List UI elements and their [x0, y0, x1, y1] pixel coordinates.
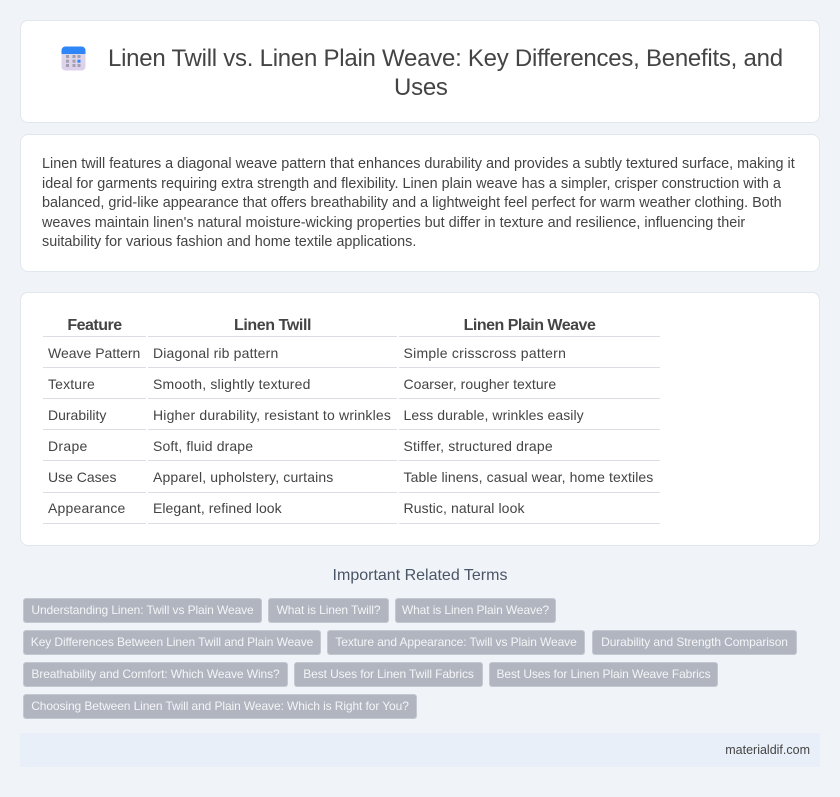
tag: What is Linen Plain Weave?: [402, 603, 549, 617]
tag: Understanding Linen: Twill vs Plain Weave: [31, 603, 254, 617]
panel: title card: [20, 20, 820, 123]
row: Drape: Soft, fluid drape: [153, 438, 253, 454]
row: Drape: [48, 438, 553, 454]
tag: Durability and Strength Comparison: [601, 635, 788, 649]
tag: [395, 598, 556, 623]
tag: [23, 598, 262, 623]
row: Texture: Coarser, rougher texture: [404, 376, 556, 392]
text block: description: suitability for various fashion and home textile applications.: [42, 234, 416, 250]
tag: What is Linen Twill?: [277, 603, 380, 617]
row: Use Cases: Apparel, upholstery, curtains: [153, 469, 333, 485]
tag: Breathability and Comfort: Which Weave Wins?: [31, 667, 280, 681]
icon: calendar grid: [62, 46, 86, 70]
row: Durability: Less durable, wrinkles easily: [404, 407, 584, 423]
tags: related terms: [23, 598, 797, 719]
tag: [23, 630, 321, 655]
tag: [294, 662, 483, 687]
row: Drape: Drape: [48, 438, 88, 454]
row: Texture: Texture: [48, 376, 95, 392]
tag: Best Uses for Linen Plain Weave Fabrics: [496, 667, 710, 681]
heading: related terms: Important Related Terms: [333, 567, 507, 584]
row: Use Cases: [48, 469, 653, 485]
title second line: Uses: [394, 74, 448, 101]
title: Linen Twill vs. Linen Plain Weave: Key Differences, Benefits, and: [108, 45, 783, 72]
row: Appearance: Elegant, refined look: [153, 500, 282, 516]
text block: description: ideal for garments requiring extra strength and flexibility. Linen plain weave has a simpler, crisper construction with a: [42, 176, 781, 192]
text block: description: [42, 156, 795, 250]
row: Weave Pattern: [48, 345, 566, 361]
text block: description: weaves maintain linen's natural moisture-wicking properties but differ in texture and resilience, influencing their: [42, 215, 745, 231]
row: Drape: Stiffer, structured drape: [404, 438, 553, 454]
tag: Best Uses for Linen Twill Fabrics: [303, 667, 474, 681]
tag: Choosing Between Linen Twill and Plain Weave: Which is Right for You?: [31, 699, 409, 713]
tag: Key Differences Between Linen Twill and Plain Weave: [31, 635, 313, 649]
row: Weave Pattern: Simple crisscross pattern: [404, 345, 566, 361]
tag: [268, 598, 389, 623]
panel: description card: [20, 134, 820, 272]
tag: [489, 662, 718, 687]
row: Use Cases: Table linens, casual wear, home textiles: [404, 469, 653, 485]
text block: description: Linen twill features a diagonal weave pattern that enhances durability and provides a subtly textured surface, making it: [42, 156, 795, 172]
table header: Feature: Feature: [67, 317, 122, 334]
text block: description: balanced, grid-like appearance that offers breathability and a lightweight feel perfect for warm weather clothing. Both: [42, 195, 782, 211]
footer bar: [20, 733, 820, 767]
tag: [592, 630, 797, 655]
row: Texture: Smooth, slightly textured: [153, 376, 311, 392]
tag: [23, 694, 417, 719]
tag: [327, 630, 585, 655]
row: Appearance: Appearance: [48, 500, 126, 516]
table header: Linen Plain Weave: Linen Plain Weave: [464, 317, 595, 334]
comparison table: [43, 317, 660, 524]
row: Durability: [48, 407, 584, 423]
row: Durability: Higher durability, resistant to wrinkles: [153, 407, 391, 423]
row: Weave Pattern: Weave Pattern: [48, 345, 140, 361]
tag: [23, 662, 288, 687]
tag: Texture and Appearance: Twill vs Plain Weave: [335, 635, 577, 649]
table header: Linen Twill: Linen Twill: [234, 317, 311, 334]
row: Appearance: Rustic, natural look: [404, 500, 525, 516]
panel: comparison table card: [20, 292, 820, 546]
footer source text: materialdif.com: [725, 743, 810, 757]
row: Weave Pattern: Diagonal rib pattern: [153, 345, 278, 361]
row: Durability: Durability: [48, 407, 106, 423]
row: Appearance: [48, 500, 525, 516]
row: Use Cases: Use Cases: [48, 469, 116, 485]
row: Texture: [48, 376, 556, 392]
